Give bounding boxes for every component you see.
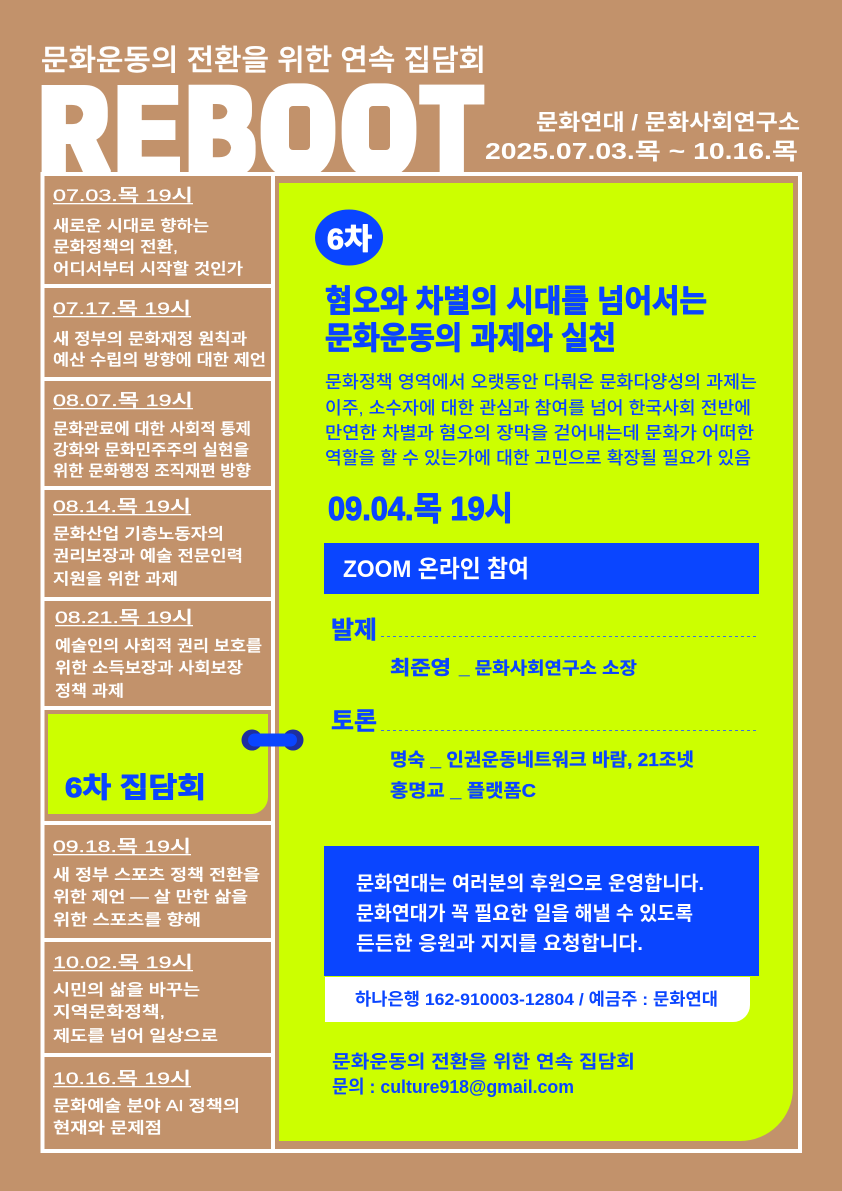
session 7: 위한 제언 — 살 만한 삶을 <box>53 888 248 906</box>
donation box: 문화연대가 꼭 필요한 일을 해낼 수 있도록 <box>356 903 693 925</box>
description: 문화정책 영역에서 오랫동안 다뤄온 문화다양성의 과제는 <box>325 372 757 392</box>
headline: 혐오와 차별의 시대를 넘어서는 <box>325 284 707 319</box>
session 1: 어디서부터 시작할 것인가 <box>53 260 243 278</box>
session 1: 새로운 시대로 향하는 <box>53 217 209 235</box>
session 2: 예산 수립의 방향에 대한 제언 <box>53 351 266 369</box>
session 8 <box>53 953 218 1045</box>
headline: 문화운동의 과제와 실천 <box>325 321 616 356</box>
description: 이주, 소수자에 대한 관심과 참여를 넘어 한국사회 전반에 <box>325 398 751 418</box>
session 8: 지역문화정책, <box>53 1003 165 1021</box>
session 1: 07.03.목 19시 <box>53 186 193 205</box>
session 8: 10.02.목 19시 <box>53 953 193 972</box>
session 5: 예술인의 사회적 권리 보호를 <box>55 637 262 655</box>
session 4: 문화산업 기층노동자의 <box>53 525 224 543</box>
session 9: 문화예술 분야 AI 정책의 <box>53 1097 240 1115</box>
connector icon <box>242 730 304 750</box>
description <box>325 372 757 468</box>
session 2 <box>53 299 266 369</box>
event date: 09.04.목 19시 <box>328 490 513 527</box>
zoom bar: ZOOM 온라인 참여 <box>343 556 529 583</box>
session 7: 새 정부 스포츠 정책 전환을 <box>53 866 260 884</box>
session 3: 강화와 문화민주주의 실현을 <box>53 441 249 459</box>
session 3: 위한 문화행정 조직재편 방향 <box>53 462 251 480</box>
session 5 <box>55 608 262 700</box>
session 4: 권리보장과 예술 전문인력 <box>53 547 243 565</box>
bank account <box>325 977 750 1022</box>
session 9: 현재와 문제점 <box>53 1119 162 1137</box>
session 4: 08.14.목 19시 <box>53 497 191 516</box>
session 5: 정책 과제 <box>55 682 124 700</box>
schedule list <box>42 186 273 1137</box>
organizers: 문화연대 / 문화사회연구소 <box>536 110 800 135</box>
main lime panel <box>279 183 793 1141</box>
donation box <box>324 846 759 976</box>
outer frame <box>40 172 802 1153</box>
session 7 <box>53 837 260 929</box>
contact <box>332 1052 635 1097</box>
session 4 <box>53 497 243 588</box>
session 7: 위한 스포츠를 향해 <box>53 911 201 929</box>
discussion section: 명숙 _ 인권운동네트워크 바람, 21조넷 <box>390 750 694 770</box>
session 1: 문화정책의 전환, <box>53 238 178 256</box>
session 8: 제도를 넘어 일상으로 <box>53 1027 218 1045</box>
session 7: 09.18.목 19시 <box>53 837 191 856</box>
contact: 문의 : culture918@gmail.com <box>332 1077 574 1097</box>
session 3 <box>53 391 251 480</box>
bank account: 하나은행 162-910003-12804 / 예금주 : 문화연대 <box>355 990 718 1009</box>
title: REBOOT: REBOOT <box>41 62 480 201</box>
session 6 highlighted <box>48 714 268 814</box>
session 9 <box>53 1069 240 1137</box>
donation box: 든든한 응원과 지지를 요청합니다. <box>356 933 643 955</box>
session 4: 지원을 위한 과제 <box>53 570 178 588</box>
zoom bar <box>324 543 759 594</box>
session 3: 08.07.목 19시 <box>53 391 193 410</box>
session 9: 10.16.목 19시 <box>53 1069 191 1088</box>
presenter section <box>331 617 759 679</box>
session 8: 시민의 삶을 바꾸는 <box>53 981 200 999</box>
contact: 문화운동의 전환을 위한 연속 집담회 <box>332 1052 635 1072</box>
description: 만연한 차별과 혐오의 장막을 걷어내는데 문화가 어떠한 <box>325 423 754 443</box>
discussion section: 홍명교 _ 플랫폼C <box>390 781 536 801</box>
subtitle: 문화운동의 전환을 위한 연속 집담회 <box>41 44 486 77</box>
donation box: 문화연대는 여러분의 후원으로 운영합니다. <box>356 873 704 895</box>
badge: 6차 <box>315 210 383 266</box>
presenter section: 발제 <box>331 617 377 644</box>
discussion section <box>331 708 759 801</box>
session 3: 문화관료에 대한 사회적 통제 <box>53 420 251 438</box>
session 2: 07.17.목 19시 <box>53 299 191 318</box>
session 5: 위한 소득보장과 사회보장 <box>55 659 243 677</box>
presenter section: _ 문화사회연구소 소장 <box>458 659 637 678</box>
session 5: 08.21.목 19시 <box>55 608 193 627</box>
session 2: 새 정부의 문화재정 원칙과 <box>53 330 247 348</box>
badge: 6차: 6차 <box>327 223 372 256</box>
description: 역할을 할 수 있는가에 대한 고민으로 확장될 필요가 있음 <box>325 448 751 468</box>
headline <box>325 284 707 356</box>
period: 2025.07.03.목 ~ 10.16.목 <box>485 138 798 164</box>
session 6 highlighted: 6차 집담회 <box>65 772 206 803</box>
presenter section: 최준영 <box>390 657 451 679</box>
session 1 <box>53 186 243 278</box>
discussion section: 토론 <box>331 708 377 735</box>
